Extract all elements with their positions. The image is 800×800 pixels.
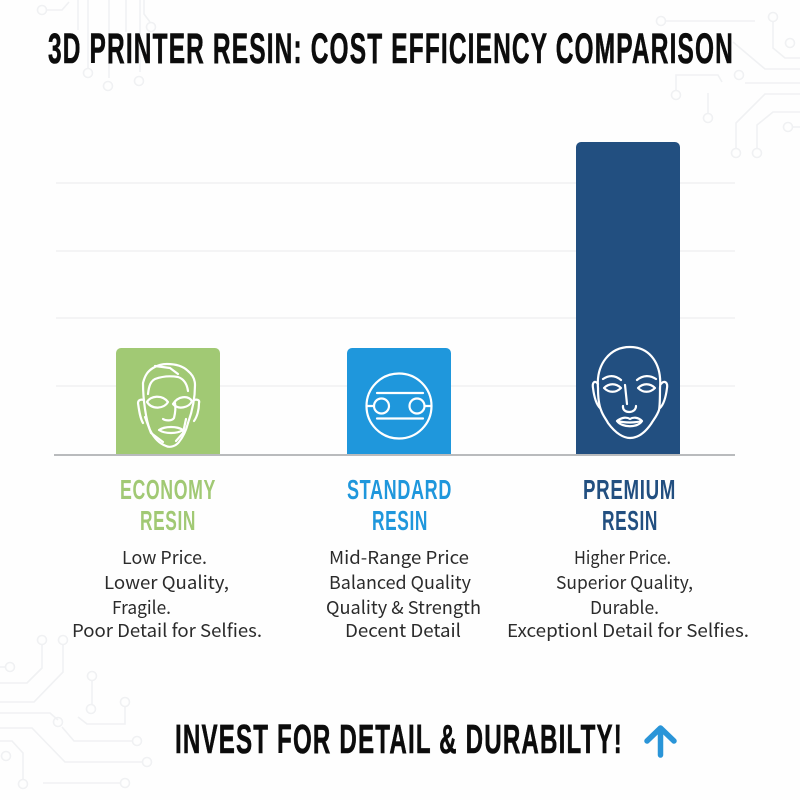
label: standard resin [347,474,452,536]
label: economy resin: ECONOMY [120,474,216,505]
text: standard description: Decent Detail [345,617,461,643]
text: premium description: Exceptionl Detail for Selfies. [507,617,749,643]
text: economy description: Poor Detail for Selfies. [72,617,262,643]
label: standard resin: RESIN [372,505,428,536]
chart baseline [54,454,735,456]
label: premium resin [583,474,676,536]
label: economy resin: RESIN [140,505,196,536]
label: premium resin: RESIN [602,505,658,536]
text: standard description [326,544,481,643]
text: economy description: Low Price. [122,544,207,570]
text: premium description: Superior Quality, [556,569,693,595]
text: economy description [72,544,262,643]
chart gridlines [56,183,735,386]
text: standard description: Balanced Quality [329,569,472,595]
icon: economy face [138,364,199,447]
label: premium resin: PREMIUM [583,474,676,505]
bar: economy resin [116,348,220,455]
text: premium description [507,544,749,643]
arrow: up [647,728,674,755]
label: standard resin: STANDARD [347,474,452,505]
text: economy description: Lower Quality, [104,569,229,595]
icon: standard circle face [366,374,432,438]
bar: premium resin [576,142,680,455]
label: economy resin [120,474,216,536]
text: standard description: Mid-Range Price [329,544,469,570]
text: economy description: Fragile. [112,594,171,620]
text: premium description: Higher Price. [574,544,671,570]
text: premium description: Durable. [590,594,659,620]
icon: premium face [593,347,667,438]
text: standard description: Quality & Strength [326,594,481,620]
bar: standard resin [347,348,451,455]
